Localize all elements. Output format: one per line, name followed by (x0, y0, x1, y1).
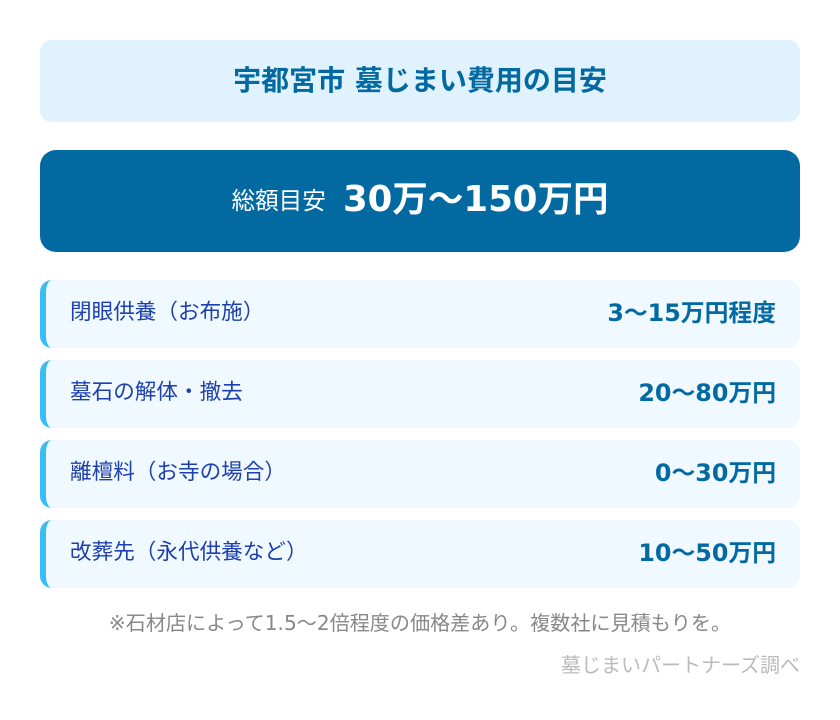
row label: 離檀料（お寺の場合） (70, 460, 286, 485)
row: gravestone removal (40, 360, 800, 428)
row value: 10〜50万円 (638, 539, 776, 567)
panel: total estimate (40, 150, 800, 252)
row label: 墓石の解体・撤去 (70, 380, 243, 405)
row value: 0〜30万円 (655, 459, 776, 487)
row: closing ceremony (40, 280, 800, 348)
note: ※石材店によって1.5〜2倍程度の価格差あり。複数社に見積もりを。 (109, 611, 731, 635)
row label: 閉眼供養（お布施） (70, 300, 264, 325)
row value: 3〜15万円程度 (607, 299, 776, 327)
title: 宇都宮市 墓じまい費用の目安 (233, 64, 607, 97)
panel: total estimate: 総額目安 30万〜150万円 (232, 179, 608, 220)
title (40, 40, 800, 122)
row value: 20〜80万円 (638, 379, 776, 407)
source credit: 墓じまいパートナーズ調べ (561, 653, 800, 677)
row: temple leaving fee (40, 440, 800, 508)
row: new burial site (40, 520, 800, 588)
row label: 改葬先（永代供養など） (70, 540, 308, 565)
